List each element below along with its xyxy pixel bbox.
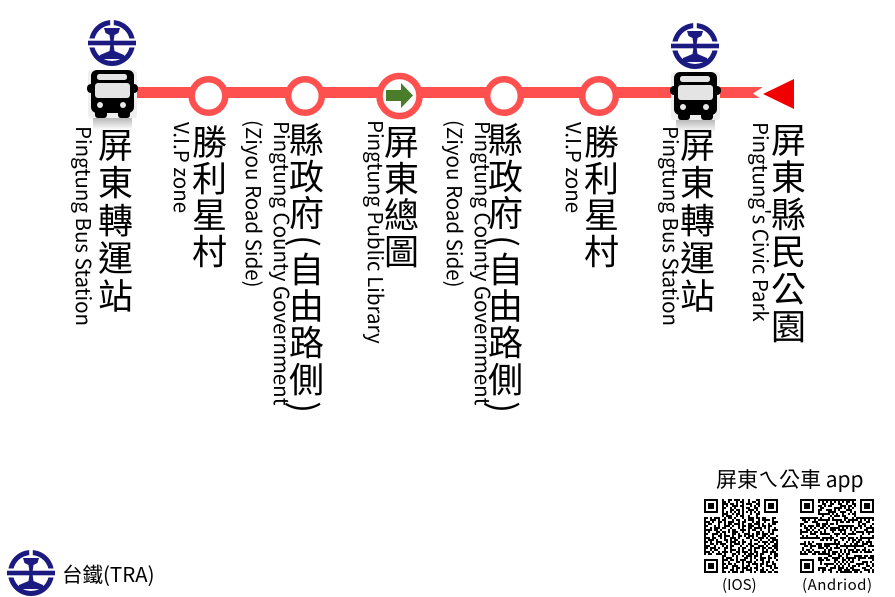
- english: V.I.P zone: V.I.P zone: [168, 122, 198, 213]
- stop marker: 勝利星村 return: [582, 79, 616, 113]
- english: (Ziyou Road Side) return: (Ziyou Road Side): [441, 120, 471, 288]
- QR code Android: [800, 499, 874, 573]
- english: Pingtung County Government: Pingtung County Government: [268, 121, 298, 405]
- english: Pingtung Bus Station: Pingtung Bus Station: [70, 126, 100, 326]
- english: Pingtung Bus Station return: Pingtung Bus Station: [657, 126, 687, 326]
- stop marker: 縣政府 return: [487, 79, 521, 113]
- icon: TRA logo at return stop: [671, 22, 719, 69]
- stop name: 屏東總圖: 屏東總圖: [376, 124, 427, 270]
- english: (Ziyou Road Side): (Ziyou Road Side): [240, 120, 270, 288]
- terminus marker: red triangle: [753, 77, 795, 111]
- stop name: 勝利星村 return: 勝利星村: [576, 124, 627, 270]
- QR caption: Andriod: (Andriod): [802, 574, 873, 595]
- stop name: 屏東轉運站: 屏東轉運站: [90, 127, 141, 316]
- icon: bus, Pingtung Bus Station return: [670, 72, 721, 132]
- english: Pingtung's Civic Park: Pingtung's Civic Park: [747, 122, 777, 322]
- current stop marker with green arrow: [380, 76, 420, 116]
- icon: TRA logo legend: [7, 549, 55, 596]
- stop marker: 勝利星村: [192, 79, 225, 113]
- stop marker: 縣政府: [288, 79, 322, 113]
- stop name: 屏東轉運站 return: 屏東轉運站: [672, 127, 723, 316]
- stop name: 縣政府(自由路側) return: 縣政 府( 自由路 側): [480, 122, 531, 418]
- legend label: 台鐵(TRA): 台鐵(TRA): [62, 558, 155, 588]
- route line: [134, 87, 762, 98]
- english: Pingtung County Government return: Pingtung County Government: [469, 121, 499, 405]
- stop name: 縣政府(自由路側): 縣政 府( 自由路 側): [281, 122, 332, 418]
- stop name: 屏東縣民公園: 屏東縣民公園: [763, 122, 814, 346]
- icon: TRA logo at first stop: [88, 19, 136, 66]
- stop name: 勝利星村: 勝利星村: [184, 124, 235, 270]
- english: V.I.P zone return: V.I.P zone: [560, 122, 590, 213]
- english: Pingtung Public Library: Pingtung Public Library: [362, 120, 392, 344]
- icon: bus, Pingtung Bus Station: [87, 70, 138, 130]
- QR caption: IOS: (IOS): [722, 574, 757, 595]
- app heading: 屏東ㄟ公車 app: [716, 464, 864, 494]
- QR code iOS: [704, 499, 778, 573]
